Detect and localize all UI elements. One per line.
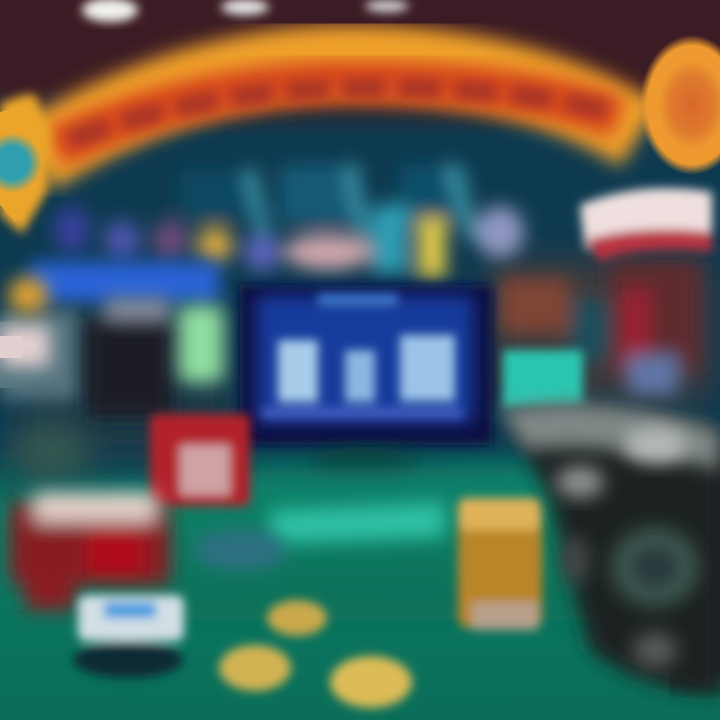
- teal block: [503, 350, 583, 408]
- small grey-blue object: [194, 530, 286, 570]
- banner: orange arched sign: [35, 62, 640, 158]
- striped awning: [580, 188, 712, 262]
- banner lettering blobs: [70, 88, 605, 140]
- stack of dark poker chips: [500, 403, 720, 700]
- right medallion: [635, 32, 720, 178]
- left blue band: [30, 262, 220, 302]
- blue and white chip: [73, 595, 184, 678]
- beer glass: [458, 498, 542, 630]
- left medallion: [0, 94, 50, 234]
- dark slot machine: [85, 298, 173, 418]
- right-side machine: [500, 262, 700, 395]
- monitor: [240, 285, 492, 483]
- green table: [100, 462, 700, 620]
- top ceiling lights: [82, 0, 409, 22]
- gold coins: [219, 600, 412, 708]
- mid-wall panels behind the monitor: [54, 165, 524, 278]
- left dark cluster: [10, 424, 90, 480]
- left white-red machine: [0, 277, 80, 400]
- monitor screen content: [262, 294, 462, 418]
- red and white dice: [10, 492, 170, 610]
- red box: [150, 414, 250, 506]
- green glowing panel: [178, 305, 224, 383]
